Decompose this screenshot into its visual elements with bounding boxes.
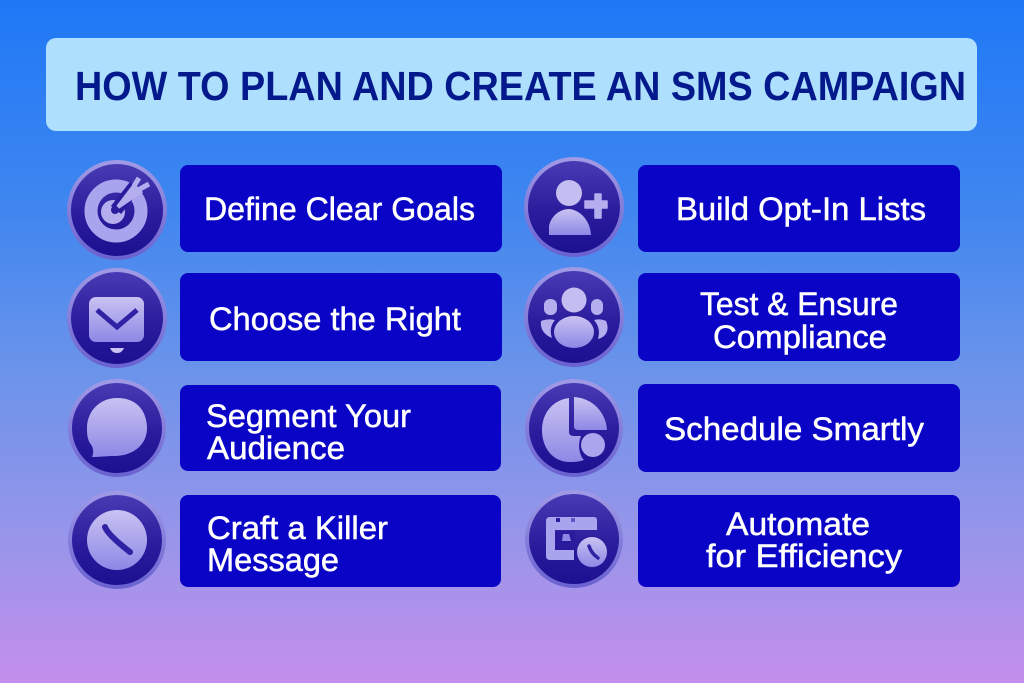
label box <box>638 165 960 252</box>
icon: group of people <box>526 269 622 365</box>
step: Build Opt-In Lists <box>526 159 960 255</box>
label: Compliance <box>713 319 887 355</box>
icon: message envelope <box>69 270 165 366</box>
step: Segment Your Audience <box>70 381 501 475</box>
title banner <box>46 38 977 131</box>
step: Automate for Efficiency <box>527 492 960 587</box>
label box <box>180 273 502 361</box>
label: Message <box>207 542 339 578</box>
label: Define Clear Goals <box>204 191 475 227</box>
label: for Efficiency <box>706 538 903 574</box>
label: Segment Your <box>206 398 411 434</box>
label <box>700 286 898 355</box>
icon: pie chart <box>527 381 621 475</box>
label: Choose the Right <box>209 301 461 337</box>
label: Craft a Killer <box>207 510 388 546</box>
label <box>206 398 411 466</box>
label <box>706 506 903 574</box>
step: Schedule Smartly <box>527 381 960 475</box>
label box <box>180 385 501 471</box>
label box <box>180 165 502 252</box>
label box <box>638 384 960 472</box>
label: Test & Ensure <box>700 286 898 322</box>
icon: speech bubble <box>70 381 164 475</box>
label: Automate <box>726 506 870 542</box>
step: Test & Ensure Compliance <box>526 269 960 365</box>
step: Craft a Killer Message <box>70 493 501 587</box>
title: HOW TO PLAN AND CREATE AN SMS CAMPAIGN <box>75 63 966 109</box>
label box <box>638 495 960 587</box>
label <box>207 510 388 578</box>
label: Schedule Smartly <box>664 411 925 447</box>
label: Build Opt-In Lists <box>676 191 926 227</box>
icon: calendar with clock <box>527 492 621 586</box>
label: Audience <box>207 430 345 466</box>
step: Choose the Right <box>69 270 502 366</box>
icon: circle with slash <box>70 493 164 587</box>
label box <box>638 273 960 361</box>
label box <box>180 495 501 587</box>
icon: add user <box>526 159 622 255</box>
icon: target with arrow <box>69 162 165 258</box>
step: Define Clear Goals <box>69 162 502 258</box>
